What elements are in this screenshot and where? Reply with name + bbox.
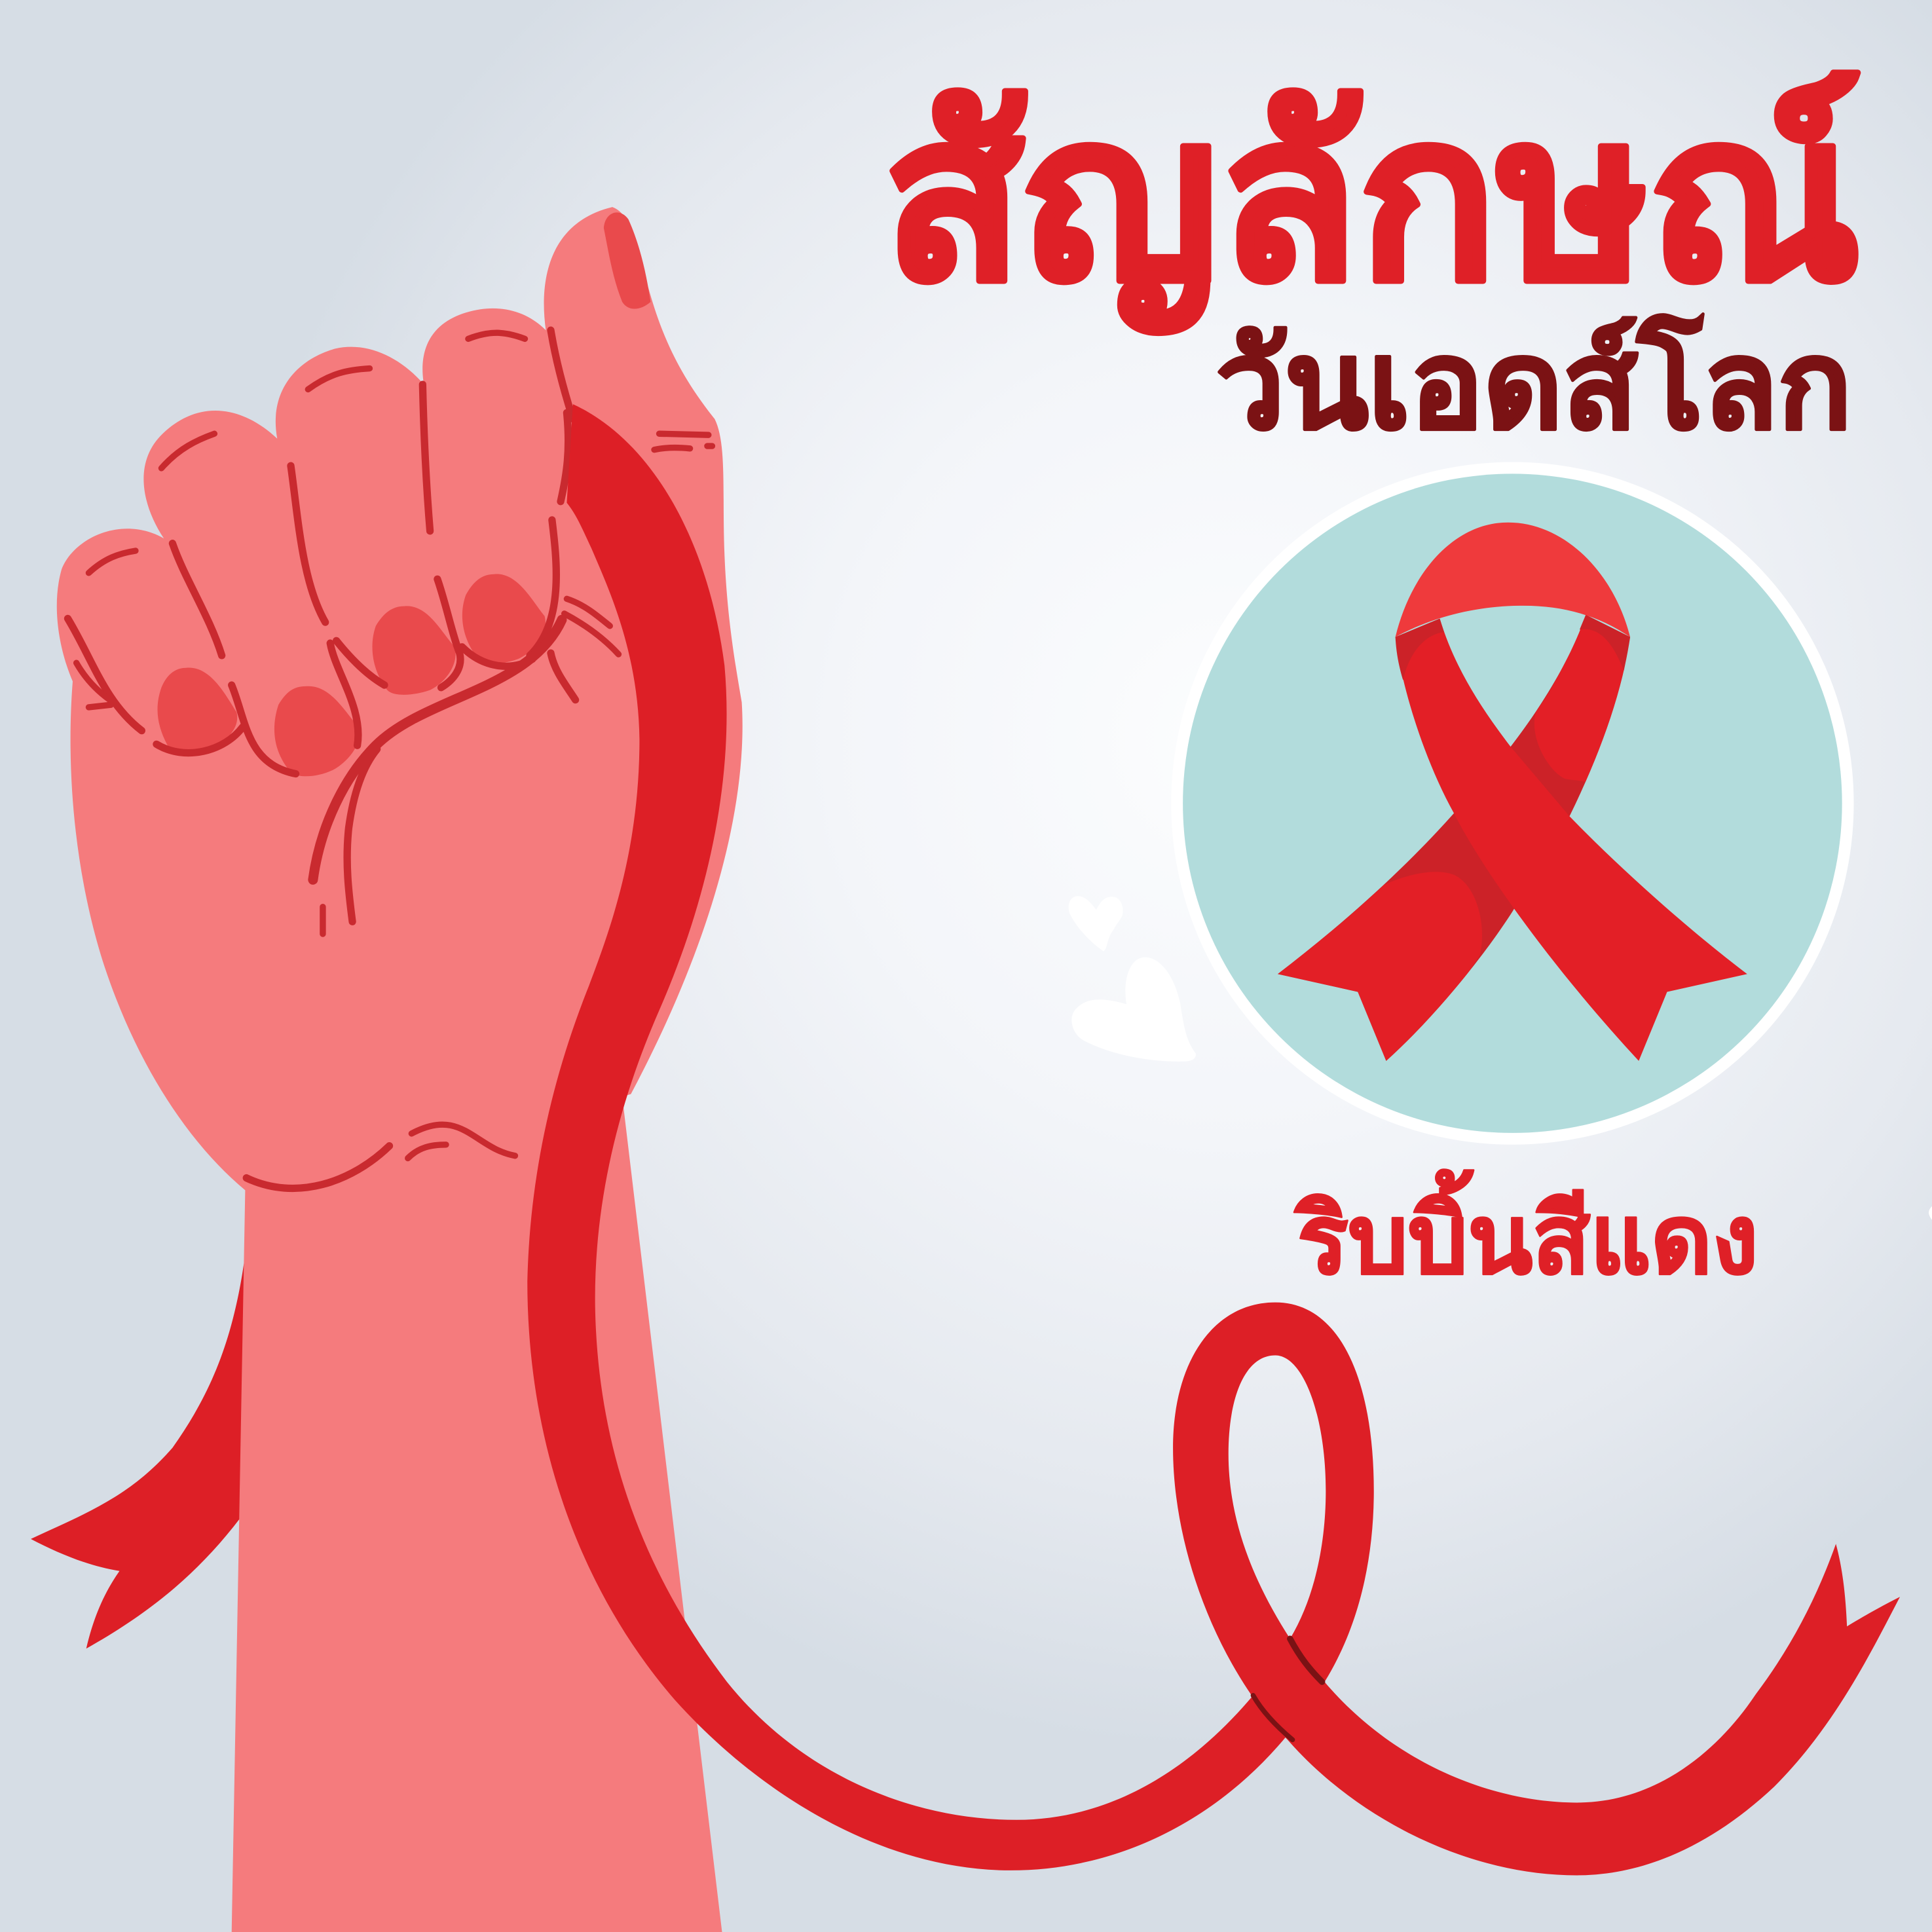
thumb nail xyxy=(604,212,650,309)
icon: edge heart fragment xyxy=(1929,1206,1932,1220)
finger nails xyxy=(158,574,546,776)
hand crease lines xyxy=(67,330,712,1188)
circle white ring xyxy=(1171,462,1854,1145)
caption: ริบบิ้นสีแดง xyxy=(1294,1168,1758,1293)
ribbon loop and right tail xyxy=(1173,1303,1900,1875)
raised fist xyxy=(57,207,743,1932)
ribbon tail behind arm xyxy=(31,1254,245,1648)
icon: large heart xyxy=(1071,957,1196,1062)
title: สัญลักษณ์ xyxy=(883,69,1861,335)
back strand of awareness ribbon xyxy=(1278,615,1631,1061)
top arch of awareness ribbon xyxy=(1396,523,1630,637)
icon: small heart xyxy=(1069,896,1123,951)
front strand of awareness ribbon xyxy=(1396,615,1747,1061)
circle teal fill xyxy=(1183,474,1842,1133)
badge: awareness ribbon in circle xyxy=(1171,462,1854,1145)
subtitle: วันเอดส์โลก xyxy=(1216,314,1852,454)
long red ribbon from hand xyxy=(527,404,1288,1870)
hand and arm shape xyxy=(57,207,743,1932)
ribbon crossing shadows xyxy=(1253,1639,1322,1740)
